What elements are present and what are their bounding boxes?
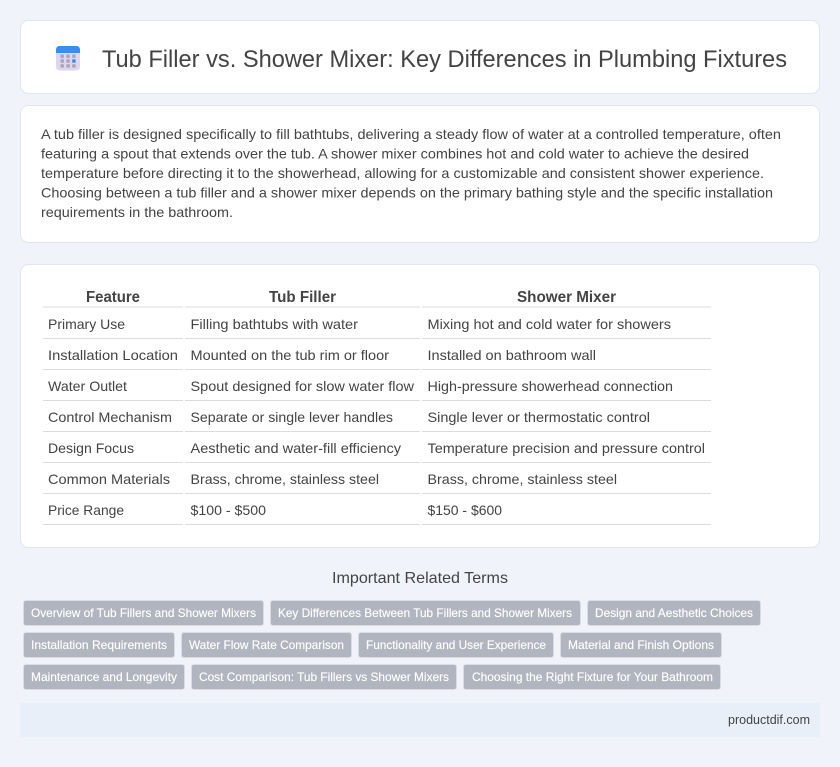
tag bbox=[24, 664, 184, 690]
tag: Installation Requirements bbox=[31, 638, 167, 652]
table row: installation location: Installed on bathroom wall bbox=[428, 347, 596, 363]
tag bbox=[560, 632, 722, 658]
tag: Design and Aesthetic Choices bbox=[595, 606, 753, 620]
tag: Functionality and User Experience bbox=[366, 638, 546, 652]
tag bbox=[24, 632, 174, 658]
text block: introduction paragraph bbox=[41, 126, 781, 220]
heading: important related terms: Important Related Terms bbox=[332, 570, 508, 587]
table row: primary use: Filling bathtubs with water bbox=[190, 316, 358, 332]
tag bbox=[588, 600, 760, 626]
tag: Water Flow Rate Comparison bbox=[189, 638, 344, 652]
table row: water outlet bbox=[43, 378, 711, 401]
table header row: Tub Filler bbox=[269, 289, 336, 306]
table row: primary use bbox=[43, 316, 711, 339]
table row: common materials: Brass, chrome, stainless steel bbox=[428, 471, 617, 487]
panel: introduction text bbox=[20, 106, 820, 242]
icon: calendar grid bbox=[56, 46, 80, 70]
table row: price range: Price Range bbox=[48, 502, 124, 518]
table row: common materials: Brass, chrome, stainless steel bbox=[190, 471, 379, 487]
tag bbox=[182, 632, 352, 658]
panel: comparison table bbox=[20, 264, 820, 548]
tag: Overview of Tub Fillers and Shower Mixers bbox=[31, 606, 256, 620]
tag: Maintenance and Longevity bbox=[31, 670, 177, 684]
table header row: Feature bbox=[86, 289, 140, 306]
table row: water outlet: Spout designed for slow water flow bbox=[190, 378, 415, 394]
table header row bbox=[43, 289, 711, 308]
text block: introduction paragraph: requirements in the bathroom. bbox=[41, 204, 233, 220]
table row: common materials bbox=[43, 471, 711, 494]
tag bbox=[358, 632, 554, 658]
table row: installation location: Installation Location bbox=[48, 347, 178, 363]
text block: introduction paragraph: A tub filler is designed specifically to fill bathtubs, delivering a steady flow of water at a controlled temperature, often bbox=[41, 126, 781, 142]
table row: control mechanism: Single lever or thermostatic control bbox=[428, 409, 650, 425]
tag: Key Differences Between Tub Fillers and Shower Mixers bbox=[278, 606, 572, 620]
text block: introduction paragraph: temperature before directing it to the showerhead, allowing for a customizable and consistent shower experience. bbox=[41, 165, 764, 181]
table row: common materials: Common Materials bbox=[48, 471, 170, 487]
tag bbox=[464, 664, 720, 690]
text block: introduction paragraph: Choosing between a tub filler and a shower mixer depends on the primary bathing style and the specific installation bbox=[41, 184, 773, 200]
panel: header bbox=[20, 20, 820, 94]
table row: design focus: Design Focus bbox=[48, 440, 134, 456]
tag: Choosing the Right Fixture for Your Bathroom bbox=[472, 670, 713, 684]
table row: installation location bbox=[43, 347, 711, 370]
table row: primary use: Mixing hot and cold water for showers bbox=[428, 316, 671, 332]
title: Tub Filler vs. Shower Mixer: Key Differences in Plumbing Fixtures bbox=[102, 46, 787, 73]
table row: price range bbox=[43, 502, 711, 525]
tag bbox=[192, 664, 456, 690]
table row: design focus: Temperature precision and pressure control bbox=[428, 440, 705, 456]
table row: primary use: Primary Use bbox=[48, 316, 125, 332]
related term tags bbox=[24, 600, 760, 690]
footer source text: productdif.com bbox=[728, 712, 810, 727]
table row: price range: $150 - $600 bbox=[428, 502, 502, 518]
tag bbox=[270, 600, 580, 626]
table row: design focus: Aesthetic and water-fill efficiency bbox=[190, 440, 401, 456]
table row: design focus bbox=[43, 440, 711, 463]
table row: control mechanism: Separate or single lever handles bbox=[190, 409, 393, 425]
tag: Material and Finish Options bbox=[568, 638, 714, 652]
table row: control mechanism bbox=[43, 409, 711, 432]
table row: price range: $100 - $500 bbox=[190, 502, 266, 518]
footer bbox=[20, 703, 820, 737]
table row: water outlet: Water Outlet bbox=[48, 378, 127, 394]
tag bbox=[24, 600, 264, 626]
table header row: Shower Mixer bbox=[517, 289, 616, 306]
tag: Cost Comparison: Tub Fillers vs Shower Mixers bbox=[199, 670, 449, 684]
table row: installation location: Mounted on the tub rim or floor bbox=[190, 347, 389, 363]
text block: introduction paragraph: featuring a spout that extends over the tub. A shower mixer combines hot and cold water to achieve the desired bbox=[41, 146, 749, 162]
table row: water outlet: High-pressure showerhead connection bbox=[428, 378, 673, 394]
table row: control mechanism: Control Mechanism bbox=[48, 409, 172, 425]
